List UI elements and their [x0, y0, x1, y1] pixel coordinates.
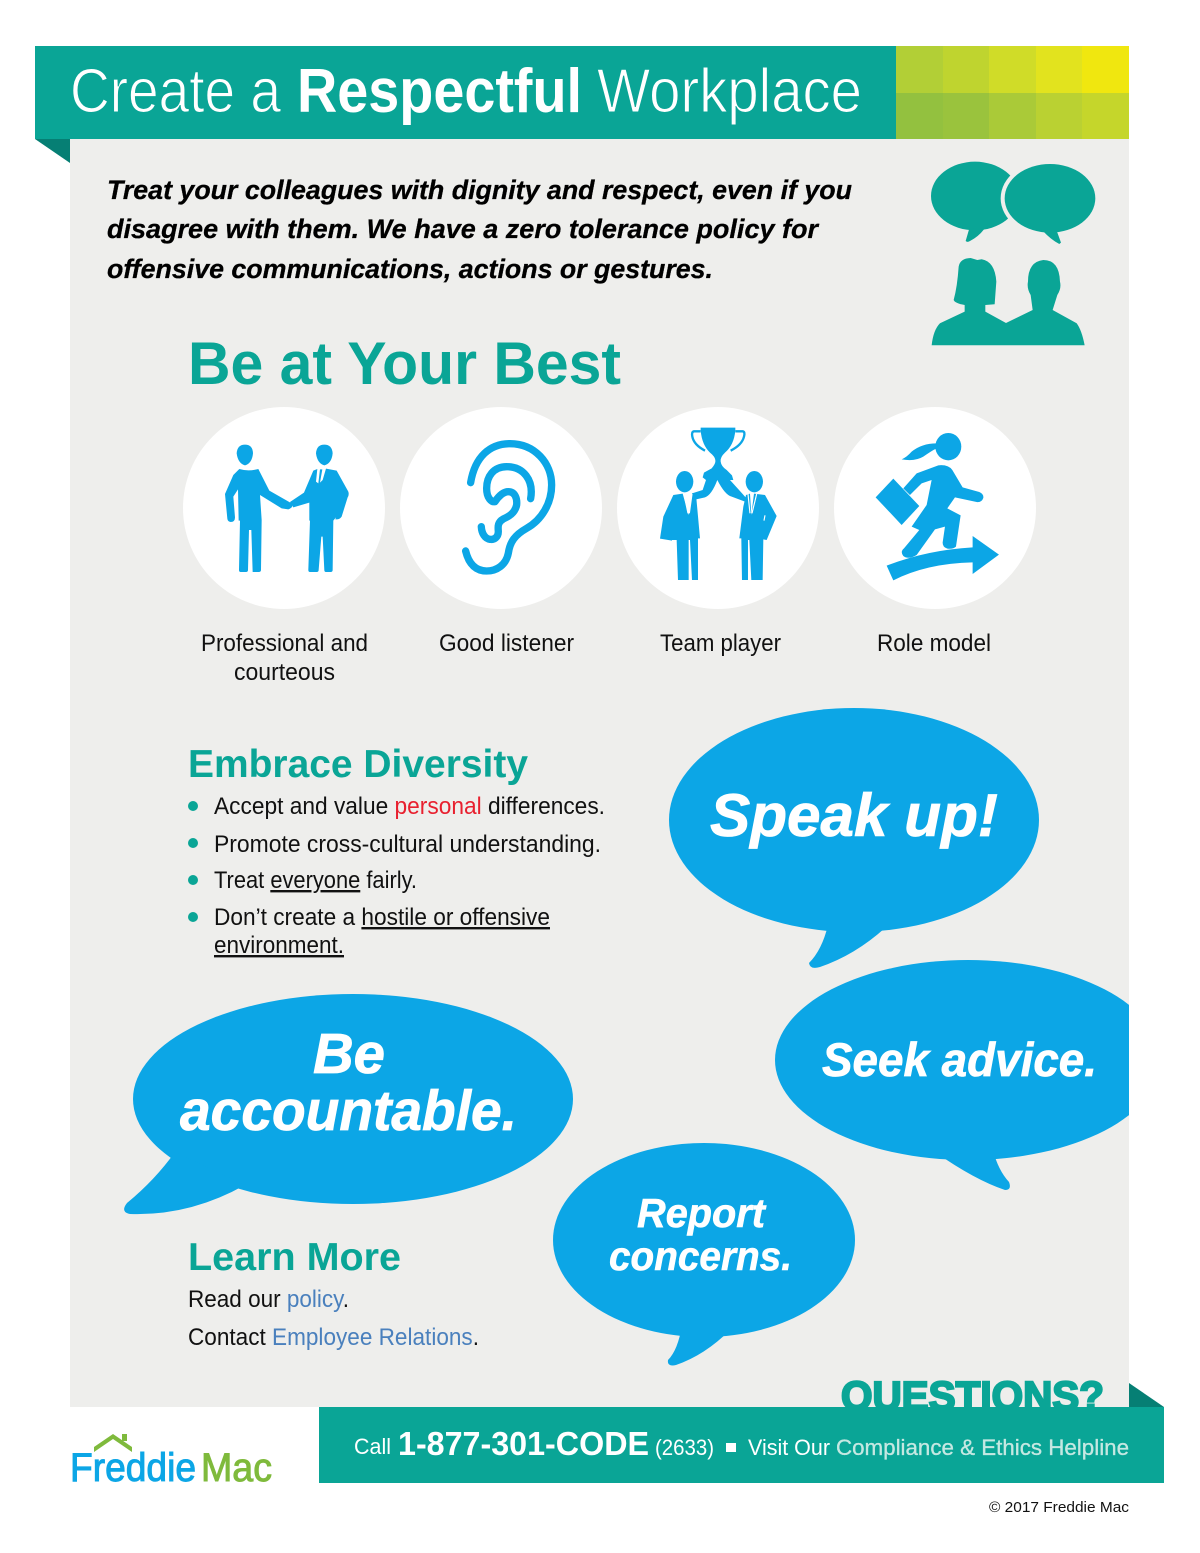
captions — [201, 630, 991, 686]
intro text — [107, 175, 852, 284]
circle: team — [617, 407, 819, 609]
circle: professional — [183, 407, 385, 609]
footer bar: 1-877-301-CODE — [398, 1425, 649, 1462]
bubble: Report concerns — [553, 1143, 855, 1365]
icon: role model running on arrow — [876, 433, 999, 580]
heading: Be at Your Best: Be at Your Best — [188, 330, 621, 397]
logo: Freddie Mac — [70, 1434, 272, 1490]
intro text: offensive communications, actions or gestures. — [107, 254, 713, 284]
footer bar: Visit Our — [748, 1435, 830, 1460]
title: Create a — [70, 57, 281, 126]
bubble: Report concerns: Report — [637, 1190, 767, 1236]
icon: handshake — [225, 445, 349, 572]
heading: Embrace Diversity: Embrace Diversity — [188, 743, 528, 786]
text: learn more links: Contact Employee Relations. — [188, 1324, 479, 1351]
title: Respectful — [297, 57, 582, 126]
bubble: Seek advice: Seek advice. — [822, 1033, 1097, 1086]
title: Workplace — [597, 57, 862, 126]
bubble: Report concerns: concerns. — [609, 1233, 792, 1279]
logo: Freddie Mac: Freddie — [70, 1446, 196, 1490]
list: diversity bullets: Promote cross-cultural understanding. — [214, 831, 601, 858]
heading: Learn More: Learn More — [188, 1236, 401, 1279]
bubble: Speak up: Speak up! — [710, 782, 998, 849]
footer bar: Compliance & Ethics Helpline — [836, 1435, 1129, 1460]
footer bar: Call — [354, 1434, 391, 1459]
panel: grey background — [70, 139, 1129, 1407]
text: learn more links — [188, 1286, 479, 1351]
bubble: Be accountable: accountable. — [180, 1079, 517, 1143]
icon: ear — [466, 444, 552, 571]
logo: Freddie Mac: Mac — [201, 1446, 272, 1490]
footer bar — [70, 1383, 1164, 1483]
header banner — [35, 46, 1129, 163]
intro text: Treat your colleagues with dignity and respect, even if you — [107, 175, 852, 205]
heading: Questions: QUESTIONS? — [841, 1373, 1104, 1419]
list: diversity bullets: Don’t create a hostile or offensive — [214, 904, 550, 931]
bubble: Speak up — [669, 708, 1039, 968]
captions: Team player — [660, 630, 781, 657]
list: diversity bullets: Treat everyone fairly. — [214, 867, 417, 894]
captions: Professional and — [201, 630, 368, 657]
circle: listener — [400, 407, 602, 609]
title — [70, 57, 862, 126]
captions: Good listener — [439, 630, 574, 657]
circle: role model — [834, 407, 1036, 609]
bubble: Be accountable: Be — [313, 1022, 385, 1086]
list: diversity bullets: environment. — [214, 932, 344, 959]
text: learn more links: Read our policy. — [188, 1286, 349, 1313]
bubble: Seek advice — [775, 960, 1161, 1190]
intro text: disagree with them. We have a zero tolerance policy for — [107, 214, 819, 244]
captions: courteous — [234, 659, 335, 686]
list: diversity bullets — [188, 793, 605, 959]
icon: team with trophy — [660, 428, 777, 580]
captions: Role model — [877, 630, 991, 657]
copyright: © 2017 Freddie Mac — [989, 1499, 1130, 1516]
bubble: Be accountable — [124, 994, 573, 1214]
footer bar: (2633) — [655, 1435, 714, 1460]
list: diversity bullets: Accept and value personal differences. — [214, 793, 605, 820]
icon: speech bubbles and two people — [931, 160, 1099, 345]
